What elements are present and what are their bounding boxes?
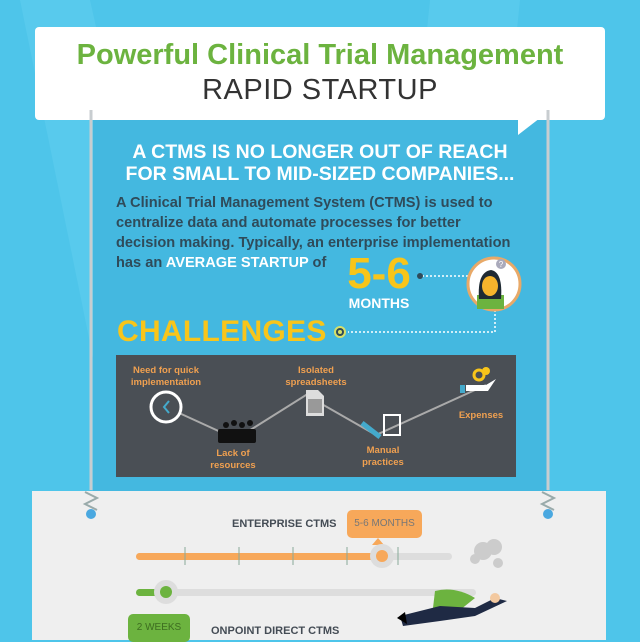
panel: challenges: spreadsheets	[285, 377, 347, 388]
callout 2 weeks	[128, 614, 190, 642]
label onpoint: ONPOINT DIRECT CTMS	[211, 625, 339, 637]
panel: challenges	[116, 355, 516, 477]
title box	[35, 27, 605, 120]
panel: challenges: Lack of	[216, 448, 250, 459]
connector dotted	[348, 273, 496, 333]
panel: challenges: Isolated	[298, 365, 334, 376]
panel: challenges: practices	[362, 457, 404, 468]
icon: clouds	[470, 539, 503, 568]
title box: RAPID STARTUP	[202, 74, 438, 106]
subheading	[126, 141, 514, 185]
callout 5-6 months: 5-6 MONTHS	[354, 518, 415, 529]
body text: has an AVERAGE STARTUP of	[116, 255, 326, 271]
stat 5-6 months: MONTHS	[349, 295, 409, 311]
challenges dot	[334, 326, 346, 338]
central panel	[93, 110, 547, 491]
panel: comparison	[32, 491, 606, 640]
body text: decision making. Typically, an enterprise implementation	[116, 235, 510, 251]
callout 5-6 months	[347, 510, 422, 538]
label enterprise: ENTERPRISE CTMS	[232, 518, 337, 530]
panel: challenges: resources	[210, 460, 256, 471]
heading: challenges: CHALLENGES	[117, 315, 327, 348]
panel: challenges: implementation	[131, 377, 201, 388]
icon: hand coins	[460, 367, 496, 393]
title box: Powerful Clinical Trial Management	[77, 39, 563, 71]
body text: A Clinical Trial Management System (CTMS) is used to	[116, 195, 493, 211]
body text: centralize data and automate processes for better	[116, 215, 461, 231]
body text	[116, 195, 510, 271]
icon: avatar woman: ?	[499, 260, 504, 269]
icon: people	[218, 420, 256, 443]
icon: flying businessman	[397, 590, 507, 626]
panel: challenges: Need for quick	[133, 365, 199, 376]
panel: challenges: Expenses	[459, 410, 503, 421]
callout 2 weeks: 2 WEEKS	[137, 622, 181, 633]
subheading: FOR SMALL TO MID-SIZED COMPANIES...	[126, 163, 514, 185]
stat 5-6 months: 5-6	[347, 249, 411, 298]
speech tail	[518, 120, 538, 135]
panel: challenges: Manual	[367, 445, 399, 456]
icon: spreadsheet	[306, 390, 324, 416]
subheading: A CTMS IS NO LONGER OUT OF REACH	[132, 141, 508, 163]
icon: manual pen	[362, 415, 400, 437]
hanging rods	[83, 110, 556, 519]
bar enterprise	[136, 538, 503, 604]
icon: clock	[151, 392, 181, 422]
icon: avatar woman	[466, 256, 522, 312]
